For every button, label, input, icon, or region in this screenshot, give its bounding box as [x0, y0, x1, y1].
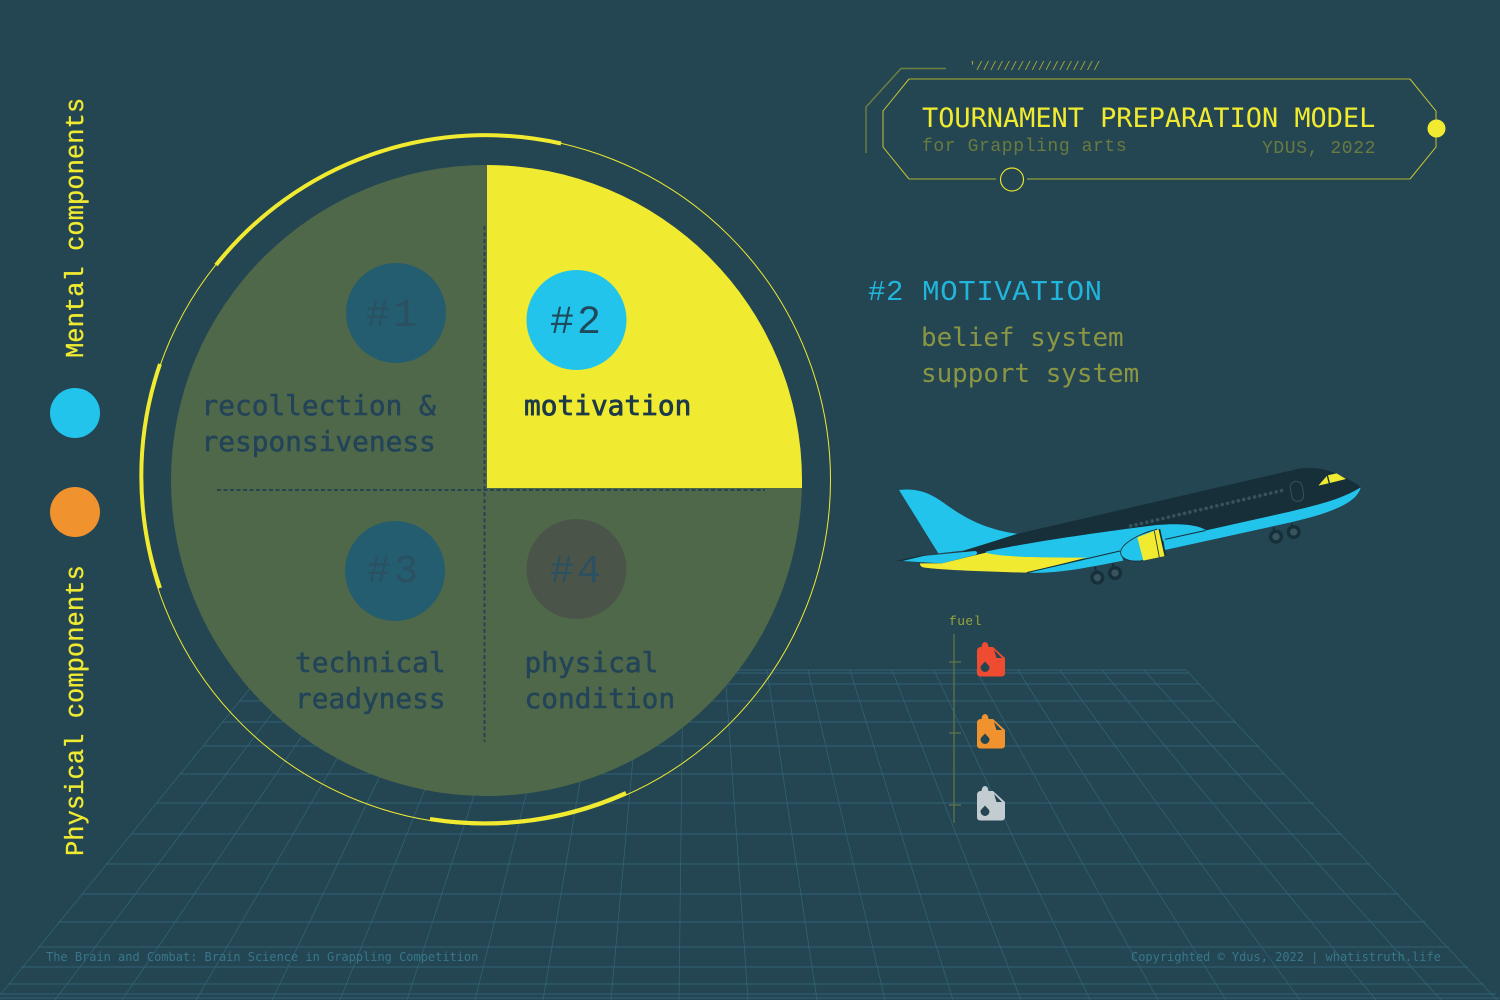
quadrant 1: #1: [366, 294, 417, 339]
quadrant 2: #2: [550, 301, 601, 346]
quadrant: motivation highlight: [487, 165, 802, 488]
icon: red fuel jug: [977, 642, 1005, 676]
engine cowl: [1137, 529, 1165, 561]
subtitle: for Grappling arts: [922, 137, 1127, 157]
quadrant 1: responsiveness: [202, 425, 436, 458]
cabin door: [1289, 480, 1305, 502]
fuselage: [962, 468, 1361, 555]
cabin windows: [1131, 490, 1284, 526]
engine: [1121, 529, 1163, 561]
quadrant 3: readyness: [295, 682, 446, 715]
side label: mental components: Mental components: [62, 98, 91, 358]
illustration: airplane: [896, 468, 1361, 583]
quadrant 4: physical: [524, 646, 658, 679]
section list: belief system: [921, 323, 1124, 353]
title frame: [866, 68, 1446, 191]
quadrant 1: [202, 263, 446, 458]
quadrant 3: #3: [367, 550, 418, 595]
title: TOURNAMENT PREPARATION MODEL: [922, 103, 1375, 134]
stabilizer: [896, 551, 977, 563]
fuel label: fuel: [949, 614, 982, 629]
quadrant pie chart: [171, 165, 802, 796]
quadrant 1: recollection &: [202, 389, 436, 422]
quadrant 3: [295, 521, 446, 715]
landing gear: [1092, 523, 1299, 583]
quadrant 4: #4: [550, 550, 601, 595]
outer ring with highlighted arcs: [140, 135, 830, 825]
wing flap: [920, 553, 1087, 573]
fuel scale: [949, 634, 961, 823]
wing: [986, 524, 1206, 558]
quadrant 2: [524, 270, 691, 422]
icon: orange fuel jug: [977, 714, 1005, 748]
footer: source: The Brain and Combat: Brain Science in Grappling Competition: [46, 950, 478, 964]
section list: support system: [921, 359, 1139, 389]
legend dot: mental: [50, 388, 100, 438]
quadrant 3: technical: [295, 646, 446, 679]
dashed axes: [217, 226, 765, 742]
section list: [921, 323, 1139, 389]
quadrant 4: condition: [524, 682, 675, 715]
author and year: YDUS, 2022: [1262, 139, 1376, 159]
side label: physical components: Physical components: [62, 565, 91, 856]
quadrant 4: [524, 519, 675, 715]
icon: grey fuel jug: [977, 786, 1005, 820]
section heading: #2 MOTIVATION: [868, 276, 1103, 309]
tail fin: [899, 489, 1018, 553]
quadrant 2: motivation: [524, 389, 691, 422]
legend dot: physical: [50, 487, 100, 537]
cockpit window: [1318, 473, 1346, 486]
footer: copyright: Copyrighted © Ydus, 2022 | whatistruth.life: [1131, 950, 1441, 964]
perspective floor grid: [0, 670, 1500, 1000]
belly: [1163, 487, 1361, 550]
hatch decoration: '//////////////////: [969, 61, 1100, 74]
